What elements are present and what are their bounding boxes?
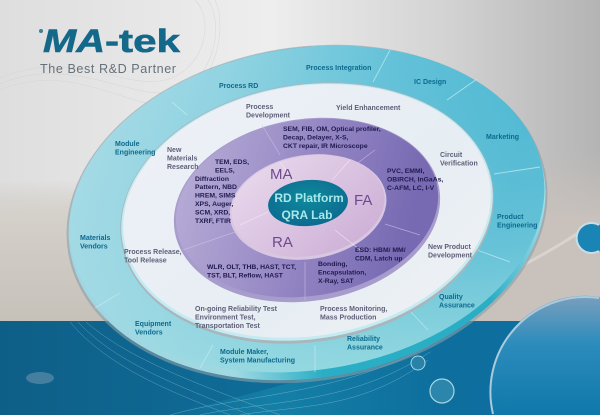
text: MA methods: SCM, XRD, bbox=[195, 209, 230, 216]
label: Reliability Assurance: Assurance bbox=[347, 344, 383, 352]
label: Product Engineering: Engineering bbox=[497, 222, 537, 230]
label: Module Engineering: Engineering bbox=[115, 150, 155, 156]
label: MA: MA bbox=[270, 166, 292, 183]
labels: MA FA RA bbox=[270, 166, 372, 251]
label: Marketing: Marketing bbox=[486, 134, 519, 141]
label: Process Release: Process Release, bbox=[124, 249, 182, 256]
label: RA: RA bbox=[272, 234, 293, 251]
label: New Product Development: New Product bbox=[428, 244, 471, 251]
text: MA methods: HREM, SIMS bbox=[195, 193, 236, 200]
label: New Materials Research: Materials bbox=[167, 156, 197, 162]
text: ESD methods: CDM, Latch up bbox=[355, 256, 403, 262]
labels: outer ring partners bbox=[80, 65, 537, 364]
logo: MA-tek: -tek bbox=[105, 23, 180, 59]
text: FA methods right: PVC, EMMI, bbox=[387, 168, 424, 175]
bubble: small lower bbox=[430, 379, 454, 403]
text: RA methods: TST, BLT, Reflow, HAST bbox=[207, 272, 284, 280]
label: Module Maker: System Manufacturing bbox=[220, 358, 295, 364]
core ellipse: RD Platform QRA Lab bbox=[266, 177, 350, 229]
labels: development stages bbox=[124, 104, 478, 330]
text: MA methods: TXRF, FTIR bbox=[195, 218, 231, 225]
label: Equipment Vendors: Equipment bbox=[135, 321, 171, 328]
label: New Product Development: Development bbox=[428, 252, 473, 260]
ring: MA FA RA bbox=[222, 143, 394, 271]
label: Circuit Verification: Verification bbox=[440, 160, 478, 168]
text: Bonding methods: X-Ray, SAT bbox=[318, 278, 354, 285]
logo: MA-tek bbox=[39, 23, 180, 59]
text: SEM methods: Decap, Delayer, X-S, bbox=[283, 134, 348, 142]
label: Materials Vendors: Vendors bbox=[80, 244, 108, 250]
label: Circuit Verification: Circuit bbox=[440, 152, 462, 159]
text: FA methods right: C-AFM, LC, I-V bbox=[387, 185, 435, 192]
label: On-going Reliability Test: On-going Reliability Test bbox=[195, 306, 277, 313]
logo: MA-tek: MA bbox=[43, 23, 105, 59]
label: Process Development: Development bbox=[246, 112, 291, 120]
text: ESD methods: ESD: HBM/ MM/ bbox=[355, 247, 406, 254]
label: Reliability Assurance: Reliability bbox=[347, 336, 380, 343]
text: MA methods: XPS, Auger, bbox=[195, 201, 233, 208]
bubble: top right bbox=[577, 223, 600, 253]
text: Bonding methods: Encapsulation, bbox=[318, 270, 366, 276]
core ellipse: RD Platform QRA Lab: QRA Lab bbox=[282, 208, 332, 222]
label: FA: FA bbox=[354, 192, 372, 209]
core ellipse: RD Platform QRA Lab: RD Platform bbox=[274, 191, 344, 205]
label: Process Integration: Process Integration bbox=[306, 65, 371, 72]
label: Module Maker: Module Maker, bbox=[220, 349, 268, 356]
label: On-going Reliability Test: Transportation Test bbox=[195, 323, 260, 330]
tagline: The Best R&D Partner bbox=[40, 62, 176, 76]
label: Yield Enhancement: Yield Enhancement bbox=[336, 105, 401, 112]
label: On-going Reliability Test: Environment Test, bbox=[195, 314, 256, 322]
label: Module Engineering: Module bbox=[115, 141, 140, 148]
label: Product Engineering: Product bbox=[497, 214, 523, 221]
label: Process Development: Process bbox=[246, 104, 273, 111]
ring: development stages bbox=[101, 56, 513, 370]
text: MA methods: TEM, EDS, bbox=[215, 159, 249, 166]
text: MA methods: Pattern, NBD bbox=[195, 184, 237, 191]
bubble: large bbox=[490, 296, 600, 415]
label: Quality Assurance: Assurance bbox=[439, 302, 475, 310]
text: SEM methods: CKT repair, IR Microscope bbox=[283, 143, 368, 150]
label: Process RD: Process RD bbox=[219, 83, 258, 90]
label: Materials Vendors: Materials bbox=[80, 235, 110, 242]
label: New Materials Research: Research bbox=[167, 164, 199, 171]
label: Equipment Vendors: Vendors bbox=[135, 330, 163, 336]
text: RA methods: WLR, OLT, THB, HAST, TCT, bbox=[207, 264, 296, 271]
label: Process Monitoring: Process Monitoring, bbox=[320, 306, 387, 313]
label: Process Release: Tool Release bbox=[124, 258, 167, 264]
labels: analysis services bbox=[195, 126, 443, 285]
text: MA methods: Diffraction bbox=[195, 176, 229, 183]
text: MA methods: EELS, bbox=[215, 167, 235, 174]
text: FA methods right: OBIRCH, InGaAs, bbox=[387, 176, 443, 184]
label: IC Design: IC Design bbox=[414, 79, 446, 86]
label: Quality Assurance: Quality bbox=[439, 294, 463, 301]
label: Process Monitoring: Mass Production bbox=[320, 314, 376, 322]
bubble: small upper bbox=[411, 356, 425, 370]
label: New Materials Research: New bbox=[167, 147, 181, 154]
text: SEM methods: SEM, FIB, OM, Optical profiler, bbox=[283, 126, 381, 133]
ring: analysis services bbox=[160, 99, 454, 321]
text: Bonding methods: Bonding, bbox=[318, 261, 347, 268]
